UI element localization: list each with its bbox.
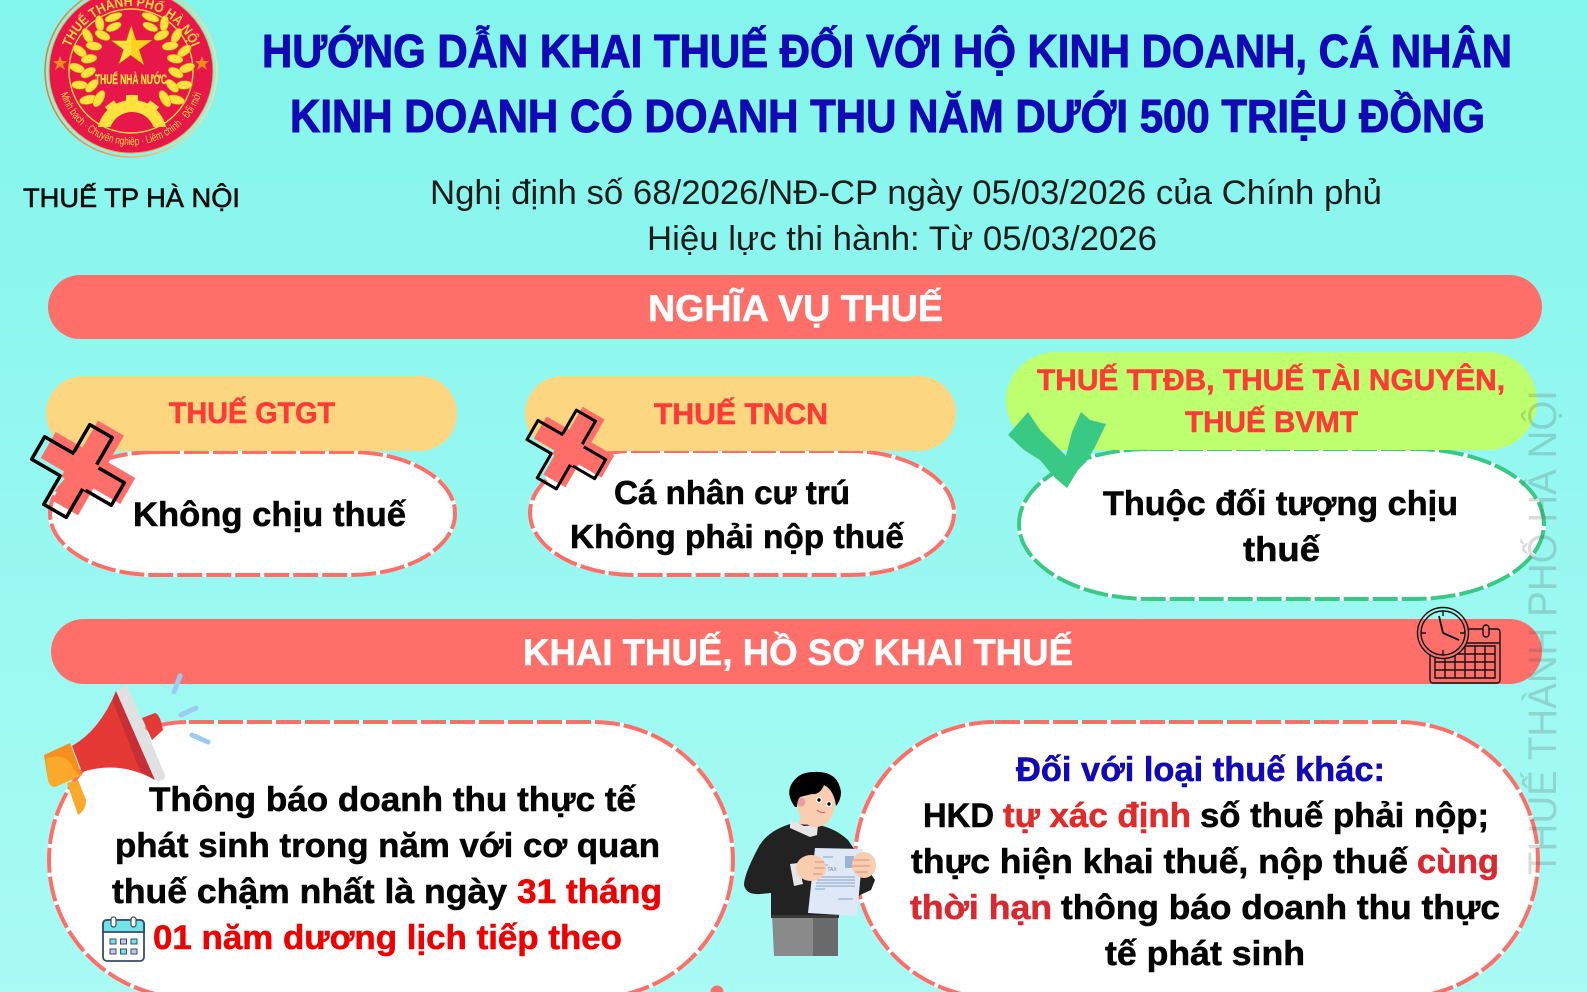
panel: special consumption, resource, environment taxes: THUẾ BVMT bbox=[1185, 405, 1358, 439]
icon: check mark bbox=[1008, 412, 1106, 488]
panel: other taxes: tự xác định bbox=[1003, 797, 1191, 835]
panel: other taxes: thông báo doanh thu thực bbox=[1061, 889, 1500, 927]
panel: personal income tax: Cá nhân cư trú bbox=[614, 474, 850, 511]
panel: personal income tax: THUẾ TNCN bbox=[654, 397, 828, 431]
panel: other taxes: thực hiện khai thuế, nộp thuế bbox=[911, 843, 1408, 881]
subtitle: decree and effective date: Nghị định số 68/2026/NĐ-CP ngày 05/03/2026 của Chính phủ bbox=[430, 174, 1382, 212]
panel: VAT: THUẾ GTGT bbox=[169, 396, 335, 430]
panel: revenue notification: phát sinh trong năm với cơ quan bbox=[115, 827, 660, 865]
agency name: THUẾ TP HÀ NỘI bbox=[23, 182, 240, 213]
panel: VAT: Không chịu thuế bbox=[133, 496, 406, 534]
icon: cross mark bbox=[15, 405, 151, 534]
title: KINH DOANH CÓ DOANH THU NĂM DƯỚI 500 TRIỆU ĐỒNG bbox=[290, 90, 1485, 142]
panel: special consumption, resource, environment taxes: THUẾ TTĐB, THUẾ TÀI NGUYÊN, bbox=[1037, 363, 1505, 397]
subtitle: decree and effective date bbox=[430, 174, 1382, 258]
panel: VAT bbox=[46, 376, 457, 575]
panel: other taxes: Đối với loại thuế khác: bbox=[1016, 751, 1385, 789]
panel: revenue notification: 31 tháng bbox=[517, 873, 662, 911]
watermark: THUẾ THÀNH PHỐ HÀ NỘI bbox=[1519, 390, 1565, 875]
panel: personal income tax: Không phải nộp thuế bbox=[570, 518, 905, 555]
panel: special consumption, resource, environment taxes bbox=[1006, 352, 1544, 599]
icon: calendar bbox=[103, 917, 144, 961]
panel: other taxes: cùng bbox=[1417, 843, 1499, 881]
panel: other taxes: tế phát sinh bbox=[1105, 935, 1305, 973]
logo: Hanoi tax emblem: Minh bạch · Chuyên nghiệp · Liêm chính · Đổi mới bbox=[60, 92, 202, 148]
panel: revenue notification: thuế chậm nhất là ngày bbox=[112, 873, 507, 911]
panel: revenue notification: 01 năm dương lịch tiếp theo bbox=[153, 919, 622, 957]
logo: Hanoi tax emblem bbox=[44, 0, 218, 158]
section banner: tax obligations bbox=[48, 275, 1542, 339]
panel: other taxes: thời hạn bbox=[910, 889, 1052, 927]
section banner: filing: KHAI THUẾ, HỒ SƠ KHAI THUẾ bbox=[523, 631, 1073, 673]
panel: revenue notification: Thông báo doanh thu thực tế bbox=[149, 781, 636, 819]
panel: personal income tax bbox=[525, 376, 956, 575]
decorative dot bbox=[710, 986, 724, 992]
panel: other taxes: số thuế phải nộp; bbox=[1200, 797, 1489, 835]
panel: other taxes: HKD bbox=[923, 797, 994, 835]
logo: Hanoi tax emblem: THUẾ NHÀ NƯỚC bbox=[95, 72, 167, 87]
icon: person holding tax document bbox=[744, 772, 876, 956]
icon: megaphone bbox=[44, 676, 208, 815]
icon: person holding tax document: TAX bbox=[827, 867, 837, 873]
subtitle: decree and effective date: Hiệu lực thi hành: Từ 05/03/2026 bbox=[647, 220, 1157, 258]
section banner: filing bbox=[51, 619, 1542, 684]
panel: other taxes bbox=[855, 722, 1538, 992]
panel: special consumption, resource, environment taxes: thuế bbox=[1243, 531, 1320, 569]
section banner: tax obligations: NGHĨA VỤ THUẾ bbox=[648, 287, 943, 329]
panel: special consumption, resource, environment taxes: Thuộc đối tượng chịu bbox=[1103, 485, 1458, 523]
icon: clock and calendar bbox=[1418, 608, 1500, 683]
icon: cross mark bbox=[513, 394, 627, 503]
panel: revenue notification bbox=[49, 722, 733, 992]
title bbox=[262, 25, 1512, 142]
